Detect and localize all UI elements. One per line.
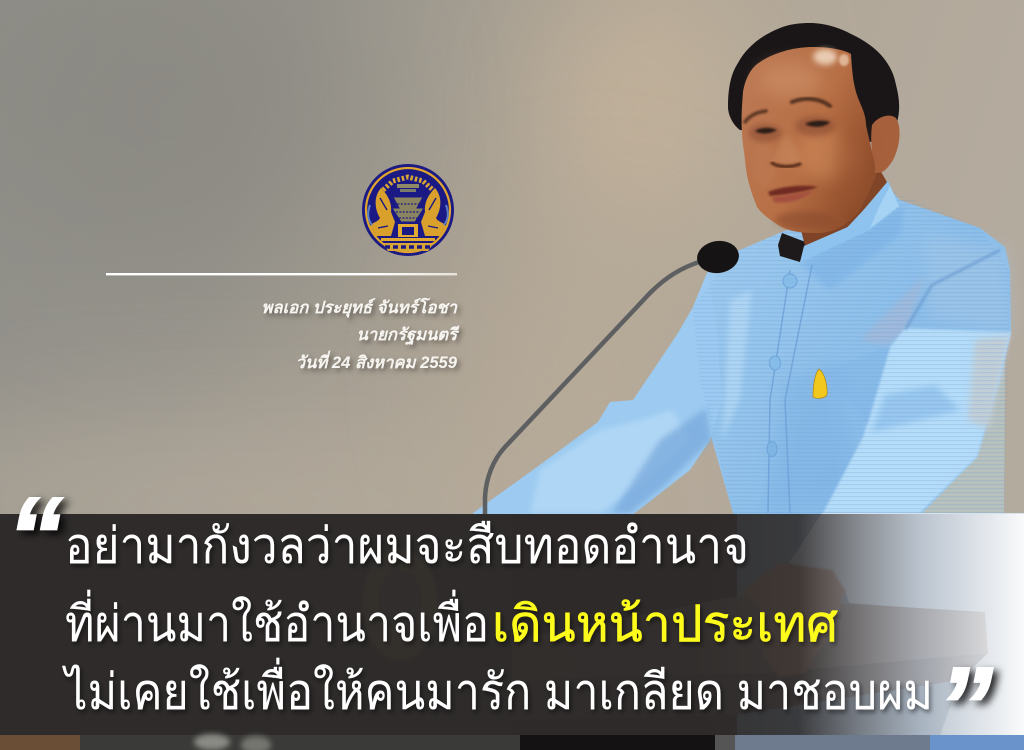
yellow pin <box>813 369 827 398</box>
caption: speaker name, title and date: วันที่ 24 สิงหาคม 2559 <box>296 350 458 372</box>
dark neck opening <box>778 233 808 262</box>
seal lions <box>370 188 395 236</box>
divider line <box>106 273 457 275</box>
nose <box>774 135 802 165</box>
line 3: ไม่เคยใช้เพื่อให้คนมารัก มาเกลียด มาชอบผม <box>61 658 933 720</box>
ear <box>871 116 900 173</box>
podium board <box>512 597 988 680</box>
right forearm <box>823 328 1011 513</box>
hair back <box>728 23 899 142</box>
eyes <box>755 128 777 134</box>
left arm <box>473 273 722 530</box>
seal crown flames <box>383 177 433 190</box>
podium emblem <box>362 549 438 661</box>
mouth <box>768 186 818 196</box>
collar <box>800 181 900 262</box>
buttons <box>783 274 797 288</box>
caption: speaker name, title and date: พลเอก ประยุทธ์ จันทร์โอชา <box>261 297 458 318</box>
podium and hand behind the quote band <box>0 513 1024 735</box>
line 1: อย่ามากังวลว่าผมจะสืบทอดอำนาจ <box>65 518 749 574</box>
face <box>742 47 876 233</box>
line 2 white part: ที่ผ่านมาใช้อำนาจเพื่อ <box>65 590 489 652</box>
microphone <box>485 238 741 515</box>
sleeve <box>789 513 1024 735</box>
neck <box>800 170 888 250</box>
rear panel of the jacket behind the right arm <box>860 363 1005 740</box>
quote band <box>0 514 1024 735</box>
eyebrows <box>745 111 766 122</box>
photo: speaker at the podium <box>473 23 1024 750</box>
hand <box>739 563 845 677</box>
caption: speaker name, title and date <box>261 297 460 372</box>
opening quotation mark: “ <box>7 474 63 599</box>
quote text <box>61 518 933 720</box>
fabric weave <box>693 190 1010 513</box>
government seal <box>362 164 454 256</box>
bottom strip under the band <box>0 734 1024 750</box>
seal urn <box>397 184 419 188</box>
caption: speaker name, title and date: นายกรัฐมนตรี <box>357 325 460 346</box>
suit body <box>693 190 1024 750</box>
fabric highlights and shadows <box>722 290 752 440</box>
seal pedestal <box>398 224 418 237</box>
eye sockets <box>748 124 782 142</box>
face highlights <box>813 49 837 65</box>
line 2 highlight: เดินหน้าประเทศ <box>492 596 838 652</box>
